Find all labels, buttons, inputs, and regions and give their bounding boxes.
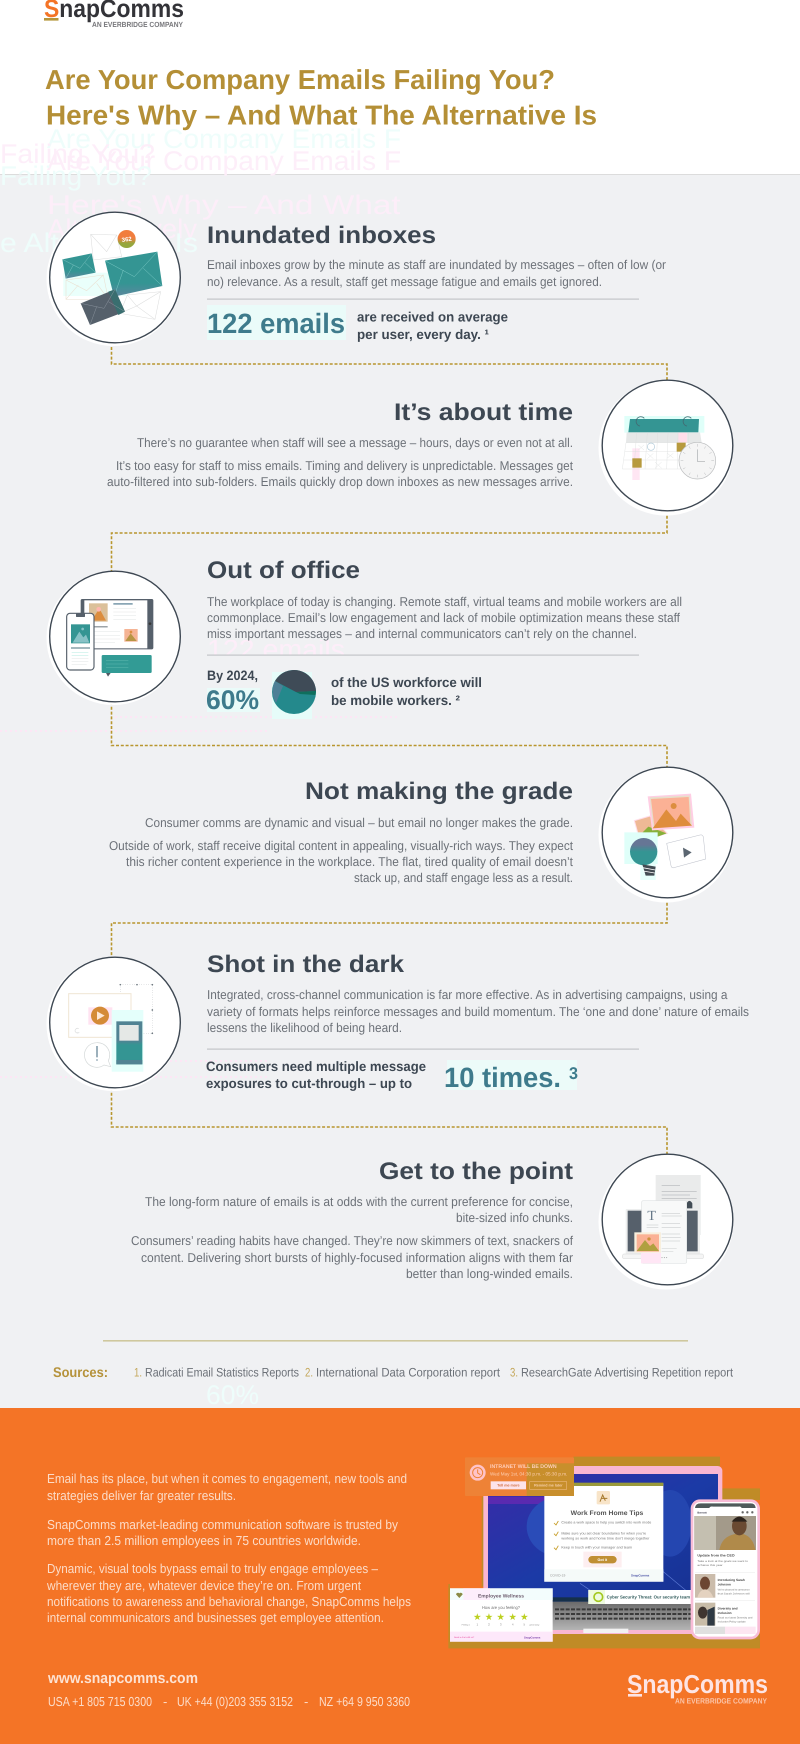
phone app mockup: that Sarah Johnson will [718,1592,750,1595]
footer text block: internal communicators and businesses get employee attention. [47,1610,384,1625]
phone app mockup: Introducing Sarah [718,1578,745,1582]
ghost print-through of the title: Failing You? [0,161,152,191]
phone app mockup: We're pleased to announce [718,1588,750,1591]
body text [109,815,573,885]
page background: header white [0,0,800,174]
body text: It’s too easy for staff to miss emails. Timing and delivery is unpredictable. Messages get [116,458,573,473]
stat text: US workforce: of the US workforce will [331,675,482,690]
card: Employee Wellness survey: 2 [488,1623,490,1626]
body text: stack up, and staff engage less as a result. [354,870,573,885]
dashed connector path between all sections [112,347,667,1154]
card: Employee Wellness survey: ★ [508,1612,517,1622]
footer contact details: - [304,1694,308,1709]
modal: Work From Home Tips: SnapComms [631,1574,649,1577]
card: Employee Wellness survey: ★ [520,1612,529,1622]
panel: Not making the grade [109,767,734,902]
icon: calendar and clock [598,380,734,516]
notification: Intranet will be down: Tell me more [497,1484,520,1488]
notification: Intranet will be down [465,1457,574,1496]
notification: Intranet will be down: Remind me later [534,1484,563,1488]
card: Employee Wellness survey: 1 [476,1623,478,1626]
card: Employee Wellness survey: SnapComms [524,1636,540,1639]
icon: envelopes in circle: 362 [121,235,132,243]
footer contact details: NZ +64 9 950 3360 [319,1694,410,1709]
body text: Email inboxes grow by the minute as staff are inundated by messages – often of low (or [207,257,667,272]
card: Employee Wellness survey: ★ [496,1612,505,1622]
phone app mockup: Bennett [697,1511,707,1514]
title: Here's Why – And What The Alternative Is [46,100,597,130]
modal: Work From Home Tips: COVID-19 [550,1574,566,1578]
page background: content grey panel [0,174,800,1408]
footer text block: strategies deliver far greater results. [47,1488,236,1503]
product mockups: laptop, notification, survey, phone [448,1457,760,1648]
card: Employee Wellness survey: Feeling s [462,1624,470,1626]
body text: bite-sized info chunks. [456,1210,573,1225]
sources: International Data Corporation report [316,1366,501,1380]
title [45,64,597,130]
body text: There’s no guarantee when staff will see a message – hours, days or even not at all. [137,435,573,450]
footer text block: SnapComms market-leading communication software is trusted by [47,1517,398,1532]
ghost print-through of the title: Are Your Company Emails Failing [47,146,467,176]
body text: commonplace. Email’s low engagement and lack of mobile optimization means these staff [207,610,680,625]
stat: 10 times: 10 times. [444,1062,561,1093]
notification: Intranet will be down: Wed May 1st, 04:30 p.m. - 05:30 p.m. [490,1471,567,1477]
stat: 122 emails [207,305,508,342]
body text [131,1194,574,1281]
phone app mockup: Inclusion [718,1611,732,1615]
body text: The workplace of today is changing. Remote staff, virtual teams and mobile workers are all [207,594,682,609]
body text: Outside of work, staff receive digital content in appealing, visually-rich ways. They expect [109,838,573,853]
card: Employee Wellness survey: 3 [500,1623,502,1626]
phone app mockup: Update from the CEO [697,1554,735,1558]
notification: Intranet will be down: INTRANET WILL BE DOWN [490,1464,557,1469]
panel: Out of office [46,557,682,719]
modal: Work From Home Tips: Create a work space to help you switch into work mode [561,1521,651,1525]
body text: variety of formats helps reinforce messages and build momentum. The ‘one and done’ nature of emails [207,1004,749,1019]
card: Employee Wellness survey: ★ [485,1612,493,1622]
title: Are Your Company Emails Failing You? [45,64,555,95]
stat: 10 times: Consumers need multiple message [206,1059,426,1074]
sources: ResearchGate Advertising Repetition report [521,1366,733,1380]
panel: Get to the point [131,1154,734,1290]
footer contact details: www.snapcomms.com [47,1670,198,1687]
icon: envelopes in circle [46,212,180,346]
ghost print-through of the 60 percent figure: 60% [206,1380,259,1410]
sources: 3. [510,1366,518,1380]
ghost print-through of the title: Here's Why – And What The [47,190,467,220]
card: Employee Wellness survey: How are you feeling? [482,1605,520,1610]
body text: content. Delivering short bursts of highly-focused information aligns with them far [141,1250,574,1265]
heading: Out of office [207,557,360,584]
sources: Sources: [53,1364,108,1380]
icon: documents and laptop [598,1154,734,1290]
footer contact details [47,1670,410,1709]
phone app mockup: Diversity and [718,1607,738,1610]
footer text block: Dynamic, visual tools bypass email to truly engage employees – [47,1561,379,1576]
panel: It's about time [107,380,734,516]
sources [53,1364,733,1380]
footer logo: SnapComms: SnapComms [627,1669,768,1699]
heading: It’s about time [394,399,573,426]
body text: lessens the likelihood of being heard. [207,1020,402,1035]
stat: 122 emails: per user, every day. ¹ [357,327,489,342]
stat: By 2024, 60% [206,668,260,715]
notification: Cyber Security Threat [588,1590,692,1604]
body text: auto-filtered into sub-folders. Emails quickly drop down inboxes as new messages arrive. [107,474,573,489]
card: Employee Wellness survey [450,1588,553,1642]
heading: Not making the grade [305,778,573,805]
body text: no) relevance. As a result, staff get message fatigue and emails get ignored. [207,274,602,289]
card: Employee Wellness survey: 4 [512,1623,514,1626]
footer logo: SnapComms: AN EVERBRIDGE COMPANY [675,1696,767,1706]
body text: this richer content experience in the workplace. The flat, tired quality of email doesn’t [126,854,573,869]
ghost print-through of the title: Alternatively [47,214,197,244]
logo: SnapComms: AN EVERBRIDGE COMPANY [92,20,183,29]
card: Employee Wellness survey: Need a chat with us? [454,1636,474,1639]
card: Employee Wellness survey: 5 [523,1623,525,1626]
modal: Work From Home Tips [544,1483,663,1582]
phone app mockup: Inclusion Policy update [718,1620,746,1623]
icon: video, device and alert [46,957,180,1091]
body text: Integrated, cross-channel communication is far more effective. As in advertising campaigns, using a [207,987,728,1002]
footer background: orange panel [0,1408,800,1744]
body text [107,435,573,489]
ghost dotted lines [0,717,398,1077]
stat text: US workforce [331,675,482,708]
modal: Work From Home Tips: Got it [598,1558,607,1562]
body text: better than long-winded emails. [406,1266,573,1281]
pie chart: 60 percent [272,670,316,719]
sources: 2. [305,1366,313,1380]
heading: Get to the point [379,1158,573,1185]
stat: By 2024, 60%: 60% [206,685,259,715]
stat: 10 times [206,1059,578,1093]
card: Employee Wellness survey: ★ [473,1612,482,1622]
ghost print-through of the title: Failing You? [0,139,155,169]
stat: 10 times: exposures to cut-through – up to [206,1076,412,1091]
phone app mockup: Take a look at the goals we want to [697,1560,748,1563]
footer text block: notifications to awareness and behavioral change, SnapComms helps [47,1594,411,1609]
stat: By 2024, 60%: By 2024, [207,668,258,683]
icon: pictures, bulb and video [598,767,734,902]
footer contact details: - [163,1694,167,1709]
phone app mockup: Johnson [718,1583,731,1587]
ghost print-through of the title: e Alternative Is [0,228,198,258]
body text [207,594,682,641]
modal: Work From Home Tips: working so work and home time don't merge together [561,1537,650,1541]
footer contact details: UK +44 (0)203 355 3152 [177,1694,293,1709]
modal: Work From Home Tips: Work From Home Tips [571,1509,643,1517]
stat: 122 emails: are received on average [357,310,508,324]
card: Employee Wellness survey: great today [529,1624,539,1626]
body text: miss important messages – and internal communicators can’t rely on the channel. [207,626,637,641]
body text [207,257,667,289]
phone app mockup: achieve this year [697,1564,723,1567]
panel: Shot in the dark [46,951,749,1093]
modal: Work From Home Tips: Make sure you set clear boundaries for when you're [561,1531,646,1535]
stat text: US workforce: be mobile workers. ² [331,693,460,708]
heading: Shot in the dark [207,951,405,978]
footer text block [46,1471,411,1625]
stat: 10 times: 3 [569,1064,578,1083]
stat: 122 emails: 122 emails [207,308,345,339]
body text: Consumers’ reading habits have changed. They’re now skimmers of text, snackers of [131,1233,573,1248]
body text [207,987,749,1035]
phone app mockup: Read our latest Diversity and [718,1616,752,1619]
footer text block: wherever they are, whatever device they’re on. From urgent [46,1578,361,1593]
gold backing patches [448,1457,760,1648]
sources: 1. [134,1366,142,1380]
icon: documents and laptop: T [647,1208,656,1223]
sources: Radicati Email Statistics Reports [145,1366,299,1380]
phone app mockup [691,1499,760,1639]
footer text block: Email has its place, but when it comes to engagement, new tools and [47,1471,407,1486]
body text: Consumer comms are dynamic and visual – but email no longer makes the grade. [145,815,573,830]
icon: tablet, phone and chat bubble [46,571,180,705]
heading: Inundated inboxes [207,222,436,249]
modal: Work From Home Tips: Keep in touch with your manager and team [561,1546,632,1550]
panel: Inundated inboxes [46,212,667,346]
body text: The long-form nature of emails is at odds with the current preference for concise, [145,1194,573,1209]
notification: Cyber Security Threat: Cyber Security Threat: Our security team [607,1595,690,1600]
laptop [483,1466,722,1634]
card: Employee Wellness survey: Employee Wellness [478,1594,524,1599]
footer contact details: USA +1 805 715 0300 [48,1694,152,1709]
ghost print-through of the title: Are Your Company Emails Failing [47,124,467,154]
footer text block: more than 2.5 million employees in 75 countries worldwide. [47,1533,361,1548]
ghost print-through of the title [2,128,400,252]
ghost print-through of the 122 emails figure: 122 emails [207,634,345,665]
